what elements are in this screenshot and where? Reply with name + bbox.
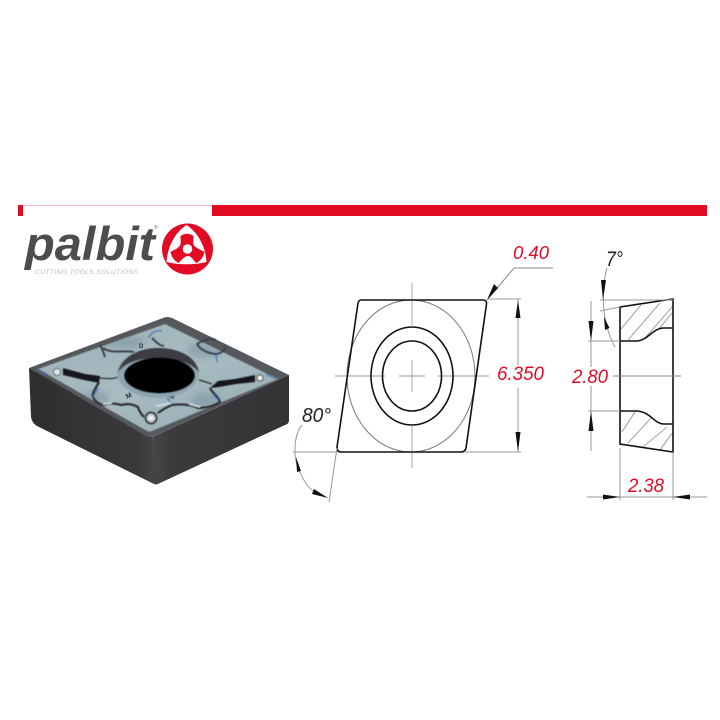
dimension: 2.80: 2.80 xyxy=(571,367,608,388)
insert markings: M xyxy=(167,392,176,401)
dimension: 2.80 xyxy=(571,301,620,451)
dimension: 7 degrees xyxy=(600,248,673,347)
dimension: 0.40: 0.40 xyxy=(513,243,549,263)
insert markings: M xyxy=(125,392,133,401)
hatching xyxy=(621,303,673,450)
logo tagline: CUTTING TOOLS SOLUTIONS xyxy=(35,269,139,276)
lower lobes xyxy=(93,382,220,417)
insert body sides xyxy=(29,368,157,484)
drawing: front view xyxy=(293,243,553,502)
left groove xyxy=(63,368,100,383)
logo emblem xyxy=(162,224,213,274)
face tonal patches xyxy=(81,336,223,407)
registered mark: ® xyxy=(154,224,158,231)
dimension: 80 degrees xyxy=(293,405,338,502)
dimension: 2.38 xyxy=(587,448,707,500)
lobe highlights xyxy=(103,403,200,407)
infographic canvas xyxy=(18,205,707,502)
drawing: section view xyxy=(571,248,707,500)
corner bumps xyxy=(54,368,263,424)
section outline xyxy=(620,299,673,452)
dimension: 2.38: 2.38 xyxy=(627,476,664,497)
upper lobes xyxy=(100,338,226,357)
dimension: 7 degrees: 7° xyxy=(606,248,623,271)
insert markings: D xyxy=(139,344,144,350)
header bar xyxy=(18,205,707,216)
centre line xyxy=(613,375,681,377)
insert top face xyxy=(38,324,278,432)
product photo: cutting insert xyxy=(29,317,289,484)
dimension: 6.350: 6.350 xyxy=(497,364,544,385)
insert hole xyxy=(117,348,199,398)
chip-breaker grooves xyxy=(36,331,276,417)
centre lines and circles xyxy=(335,283,489,468)
logo wordmark: palbit xyxy=(23,217,157,270)
insert outline xyxy=(337,300,487,452)
logo: palbit xyxy=(23,217,213,276)
insert markings xyxy=(125,344,176,401)
blue accents xyxy=(36,331,276,405)
dimension: 0.40 xyxy=(487,243,553,300)
dimension: 80 degrees: 80° xyxy=(302,405,331,427)
insert top rim xyxy=(29,317,289,437)
dimension: 6.350 xyxy=(465,299,544,452)
